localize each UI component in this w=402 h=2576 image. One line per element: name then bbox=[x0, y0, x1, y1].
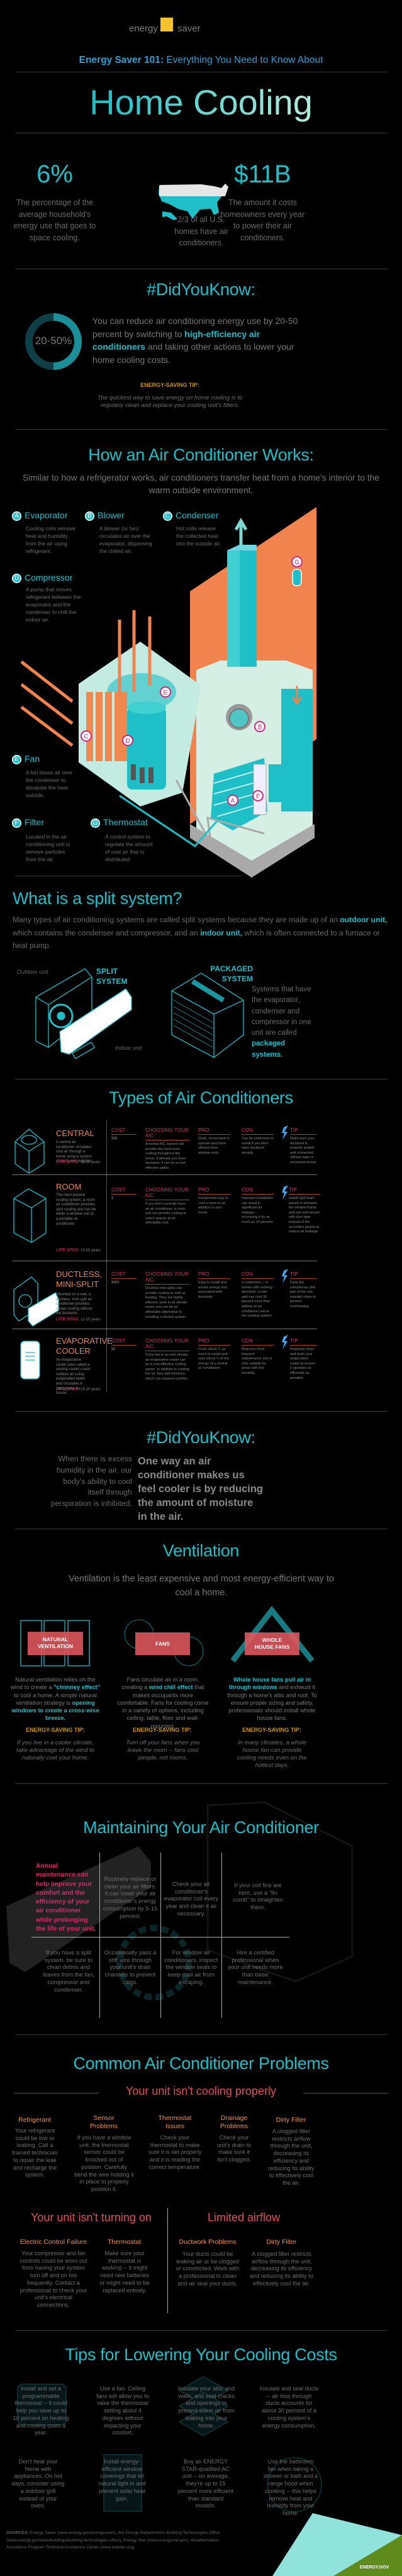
ventilation: whole house fans: HOUSE FANS bbox=[255, 1644, 289, 1650]
text: Use the bathroom fan when taking a shower or bath and a range hood when cooking -- this helps remove heat and humidity from your home. bbox=[264, 2458, 318, 2516]
row: ductless: CHOOSING YOUR A/C bbox=[145, 1271, 189, 1283]
did you know text: You can reduce air conditioning energy use by 20-50 percent by switching to high-efficiency air conditioners and taking other actions to lower your home cooling costs. bbox=[92, 316, 298, 365]
problem: thermostat: Thermostat bbox=[158, 2114, 192, 2122]
row: central: $$$ bbox=[111, 1137, 117, 1140]
stat 6%: 6% bbox=[36, 160, 73, 188]
row: ductless: CON bbox=[242, 1271, 253, 1277]
subheading: not cooling bbox=[14, 2093, 99, 2094]
text: Dirty Filter bbox=[267, 2238, 296, 2246]
ventilation: natural bbox=[28, 1632, 83, 1655]
label C condenser: C bbox=[165, 513, 170, 520]
type icons bbox=[14, 1129, 59, 1379]
text: Similar to how a refrigerator works, air conditioners transfer heat from a home's interior to the warm outside environment. bbox=[23, 473, 379, 495]
row: room: $ bbox=[111, 1196, 113, 1200]
packaged system text: SYSTEM bbox=[222, 974, 253, 983]
ventilation: natural: VENTILATION bbox=[38, 1643, 73, 1649]
problem: drainage bbox=[220, 2114, 248, 2130]
energy tip 1: ENERGY-SAVING TIP: bbox=[140, 382, 199, 388]
row: central: TIP bbox=[290, 1127, 298, 1133]
row: evaporative: Requires more frequent maintenance and is only suitable for areas with low humidity. bbox=[242, 1347, 272, 1375]
text: The quickest way to save energy on home cooling is to regularly clean and replace your cooling unit's filters. bbox=[98, 394, 242, 409]
AC diagram illustration: D bbox=[125, 738, 130, 745]
problem: thermostat: Issues bbox=[165, 2122, 184, 2130]
stat $11B: $11B bbox=[234, 160, 291, 188]
row: room: The most popular cooling system, a room air conditioner provides spot cooling and can be either a window unit or a portable air conditioner. bbox=[56, 1193, 96, 1226]
energy.gov badge: ENERGY.GOV bbox=[360, 2565, 389, 2570]
maintenance grid: Annual maintenance can help improve your comfort and the efficiency of your air conditioner while prolonging the life of your unit. bbox=[36, 1863, 96, 1932]
row: room: CHOOSING YOUR A/C bbox=[145, 1187, 189, 1198]
page curl bbox=[272, 2513, 402, 2576]
label G thermostat: Thermostat bbox=[103, 817, 148, 827]
text: Systems that have the evaporator, condenser and compressor in one unit are called packaged systems. bbox=[252, 986, 311, 1059]
AC diagram illustration: G bbox=[294, 559, 299, 566]
row: ductless: Ductless mini-splits can provide cooling as well as heating. They are highly efficient, work in all climate zones and can be an affordable alternative to installing a ducted system. bbox=[145, 1286, 187, 1319]
text: Your ducts could be leaking air or be clogged or constricted. Work with a professional to clean and air seal your ducts. bbox=[176, 2251, 239, 2287]
row: central: Can be expensive to install if you don't have ductwork already. bbox=[242, 1137, 274, 1155]
row: evaporative: An evaporative cooler (also called a swamp cooler) cools outdoor air using evaporated water and circulates it throughout the house. bbox=[56, 1358, 91, 1395]
heading: split system: What is a split system? bbox=[13, 889, 182, 908]
heading: tips: Tips for Lowering Your Cooling Costs bbox=[65, 2345, 337, 2364]
label D compressor: D bbox=[14, 575, 19, 582]
text: Use a fan. Ceiling fans will allow you to raise the thermostat setting about 4 degrees without impacting your comfort. bbox=[96, 2385, 149, 2436]
sources: SOURCES: Energy Saver (www.energy.gov/energysaver), the Energy Department's Building Technologies Office (www.energy.gov/eere/buildings/building-technologies-office), Energy Star (www.energystar.gov), Weatherization Assistance Program Technical Assistance Center (www.waptac.org) bbox=[6, 2531, 220, 2550]
ventilation: fans: FANS bbox=[155, 1641, 170, 1647]
row: central: COST bbox=[111, 1127, 125, 1133]
row: evaporative: $$ bbox=[111, 1347, 115, 1351]
AC diagram illustration: E bbox=[164, 689, 168, 696]
text: Natural ventilation relies on the wind to create a "chimney effect" to cool a home. A simple natural ventilation strategy is opening windows to create a cross-wise breeze. bbox=[11, 1676, 100, 1721]
text: Turn off your fans when you leave the room -- fans cool people, not rooms. bbox=[126, 1739, 200, 1761]
AC diagram illustration: B bbox=[258, 724, 262, 731]
label B blower bbox=[85, 510, 125, 521]
ventilation: whole house fans: WHOLE bbox=[262, 1637, 282, 1643]
row: central: PRO bbox=[198, 1127, 209, 1133]
row: evaporative bbox=[56, 1336, 317, 1395]
stat $11B: The amount it costs homeowners every year to power their air conditioners. bbox=[221, 198, 304, 242]
row: evaporative: EVAPORATIVE bbox=[56, 1336, 113, 1346]
text: Indoor unit bbox=[115, 1045, 142, 1051]
row: central: A central air conditioner circulates cool air through a home using a system of ducts and registers. bbox=[56, 1140, 93, 1163]
stat 6% bbox=[14, 160, 96, 242]
problem: drainage: Drainage bbox=[221, 2114, 247, 2122]
row: central bbox=[56, 1127, 317, 1170]
packaged system illustration bbox=[172, 973, 243, 1057]
text: Hot coils release the collected heat into the outside air. bbox=[176, 525, 221, 547]
label G thermostat: G bbox=[93, 820, 98, 827]
text: Check your unit's drain to make sure it isn't clogged. bbox=[217, 2134, 251, 2163]
row: ductless: MINI-SPLIT bbox=[56, 1280, 99, 1289]
row: evaporative: LIFE SPAN: 15-20 years bbox=[56, 1387, 101, 1391]
bolt icons bbox=[282, 1125, 288, 1349]
text: A pump that moves refrigerant between the evaporator and the condenser to chill the indoor air. bbox=[26, 586, 81, 623]
text: Insulate and seal ducts -- air loss through ducts accounts for about 30 percent of a cooling system's energy consumption. bbox=[259, 2385, 318, 2429]
stat 2/3: 2/3 of all U.S. bbox=[177, 215, 225, 224]
maintenance grid: Check your air conditioner's evaporator coil every year and clean it as necessary. bbox=[164, 1881, 218, 1917]
donut chart 20-50% bbox=[29, 317, 78, 366]
text: Fans circulate air in a room, creating a wind chill effect that makes occupants more comfortable. Fans for cooling come in a variety of options, including ceiling, table, floor and wall-mounted. bbox=[117, 1676, 209, 1729]
heading: did you know 2: #DidYouKnow: bbox=[147, 1428, 255, 1447]
row: ductless: Is expensive -- in homes with existing ductwork, a mini-split can cost 30 percent more than adding an air conditioner unit to the existing system. bbox=[242, 1281, 272, 1318]
problem: drainage: Problems bbox=[220, 2122, 248, 2130]
logo bbox=[129, 18, 201, 34]
row: ductless: Mounted on a wall, a ductless, mini-split air conditioner provides zoned cooling without the ductwork. bbox=[56, 1293, 92, 1315]
maintenance grid: If your coil fins are bent, use a "fin comb" to straighten them. bbox=[233, 1882, 283, 1910]
text: SPLIT bbox=[96, 967, 118, 976]
row: ductless: TIP bbox=[290, 1271, 298, 1277]
text: In many climates, a whole house fan can provide cooling needs even on the hottest days. bbox=[237, 1739, 307, 1769]
text: If you live in a cooler climate, take advantage of the wind to naturally cool your home. bbox=[16, 1739, 94, 1761]
text: A clogged filter restricts airflow through the unit, decreasing its efficiency and reducing its ability to effectively cool the air. bbox=[250, 2251, 313, 2287]
text: Make sure your thermostat is working -- it might need new batteries or might need to be replaced entirely. bbox=[99, 2250, 150, 2294]
row: evaporative: TIP bbox=[290, 1338, 298, 1344]
ventilation: fans bbox=[135, 1632, 190, 1655]
row: room: PRO bbox=[198, 1187, 209, 1193]
subheading: limited airflow: Limited airflow bbox=[208, 2211, 280, 2224]
label B blower: B bbox=[87, 513, 92, 520]
row: room: Improper installation can result in significant air leakage – increasing it by as much as 10 percent. bbox=[242, 1196, 274, 1224]
subtitle: Energy Saver 101: Everything You Need to Know About bbox=[79, 55, 323, 65]
text: Whole house fans pull air in through windows and exhaust it through a home's attic and roof. To ensure proper sizing and safety, professionals should install whole house fans. bbox=[227, 1676, 317, 1721]
label F filter bbox=[12, 817, 44, 828]
text: Your compressor and fan controls could be worn out from having your system turn off and on too frequently. Contact a professional to check your unit's electrical connections. bbox=[20, 2250, 87, 2308]
row: central: CENTRAL bbox=[56, 1129, 94, 1138]
label E fan: Fan bbox=[25, 754, 40, 764]
row: room: CON bbox=[242, 1187, 253, 1193]
row: central: Quiet, convenient to operate and more efficient than window units. bbox=[198, 1137, 230, 1155]
problem: dirty filter: Dirty Filter bbox=[276, 2116, 306, 2124]
text: ENERGY-SAVING TIP: bbox=[242, 1727, 301, 1733]
row: evaporative: Costs about ½ as much to install and uses about ¼ of the energy of a central air conditioner. bbox=[198, 1347, 229, 1370]
table: types bbox=[13, 1120, 317, 1392]
problem: thermostat bbox=[158, 2114, 192, 2130]
text: Install energy-efficient window coverings that let natural light in and prevent solar heat gain. bbox=[98, 2458, 146, 2502]
label F filter: F bbox=[14, 820, 19, 827]
text: Your refrigerant could be low or leaking. Call a trained technician to repair the leak and recharge the system. bbox=[12, 2127, 58, 2178]
AC diagram illustration: F bbox=[256, 793, 260, 800]
problem: refrigerant: Refrigerant bbox=[18, 2116, 51, 2124]
stat 6%: The percentage of the average household's energy use that goes to space cooling. bbox=[14, 198, 96, 242]
text: When there is excess humidity in the air, our body's ability to cool itself through perspiration is inhibited. bbox=[51, 1454, 132, 1508]
packaged system text: PACKAGED bbox=[210, 964, 253, 973]
row: central: LIFE SPAN: 15-20 years bbox=[56, 1160, 101, 1164]
row: room: LIFE SPAN: 10-15 years bbox=[56, 1248, 101, 1252]
split system labels: Outdoor unit bbox=[17, 969, 48, 975]
row: evaporative: COST bbox=[111, 1338, 125, 1344]
split system illustration bbox=[36, 969, 131, 1059]
label E fan bbox=[12, 754, 40, 764]
stat 2/3: conditioners. bbox=[179, 238, 223, 247]
tips row 2: Don't heat your home with appliances. On hot days, consider using a outdoor grill instead of your oven. bbox=[12, 2458, 64, 2509]
packaged system text bbox=[210, 964, 253, 983]
problem: sensor: Problems bbox=[90, 2122, 118, 2130]
text: Ventilation is the least expensive and most energy-efficient way to cool a home. bbox=[69, 1574, 334, 1598]
label A evaporator: Evaporator bbox=[25, 510, 67, 520]
row: room: Install rigid foam panels in between the window frame and unit and secure with duct tape instead of the accordion panels to reduce air leakage. bbox=[289, 1196, 320, 1234]
row: room: ROOM bbox=[56, 1182, 81, 1191]
text: A blower (or fan) circulates air over the evaporator, dispersing the chilled air. bbox=[99, 525, 152, 554]
row: ductless bbox=[56, 1269, 317, 1322]
AC diagram illustration bbox=[21, 507, 316, 878]
text: Many types of air conditioning systems are called split systems because they are made up of an outdoor unit, which contains the condenser and compressor, and an indoor unit, which is often connected to a furnace or heat pump. bbox=[13, 915, 387, 950]
stat 2/3 bbox=[174, 215, 228, 247]
subheading: not turning on: Your unit isn't turning on bbox=[31, 2211, 152, 2224]
stat 2/3: homes have air bbox=[174, 226, 228, 235]
text: A clogged filter restricts airflow through the unit, decreasing its efficiency and reducing its ability to effectively cool the air. bbox=[268, 2128, 315, 2186]
icon: US map bbox=[159, 184, 228, 220]
row: central: CHOOSING YOUR A/C bbox=[145, 1127, 189, 1139]
row: ductless: Easy to install and avoids energy loss associated with ductwork. bbox=[198, 1281, 227, 1299]
text: If you have a window unit, the thermostat sensor could be knocked out of position. Carefully bend the wire holding it in place to properly position it. bbox=[74, 2134, 134, 2192]
heading: types: Types of Air Conditioners bbox=[109, 1088, 293, 1107]
row: room: COST bbox=[111, 1187, 125, 1193]
ventilation: whole house fans bbox=[245, 1632, 299, 1655]
heading: ventilation: Ventilation bbox=[163, 1541, 239, 1560]
text: Located in the air conditioning unit to remove particles from the air. bbox=[26, 834, 70, 862]
text: Electric Control Failure bbox=[20, 2238, 87, 2246]
row: central: Make sure your ductwork is properly sealed and connected without sags or excessive bends. bbox=[290, 1137, 317, 1164]
text: A control system to regulate the amount of cool air that is distributed. bbox=[105, 834, 153, 862]
ventilation icons bbox=[21, 1610, 312, 1666]
label D compressor: Compressor bbox=[25, 572, 72, 583]
row: ductless: COST bbox=[111, 1271, 125, 1277]
AC diagram illustration: C bbox=[84, 733, 89, 740]
text: A fan blows air over the condenser to dissipate the heat outside. bbox=[26, 769, 72, 798]
text: Ductwork Problems bbox=[179, 2238, 237, 2246]
row: ductless: Keep the compressor (the part of the unit outside) clean to prevent overheating. bbox=[290, 1281, 316, 1308]
heading: did you know 1: #DidYouKnow: bbox=[147, 280, 255, 299]
row: evaporative: COOLER bbox=[56, 1346, 91, 1356]
row: room: TIP bbox=[289, 1187, 296, 1193]
tips row 1: Install and set a programmable thermostat -- it could help you save up to 10 percent on heating and cooling costs a year. bbox=[13, 2385, 69, 2436]
label F filter: Filter bbox=[25, 817, 44, 827]
text: SYSTEM bbox=[96, 976, 127, 985]
problem: sensor bbox=[90, 2114, 118, 2130]
label B blower: Blower bbox=[98, 510, 125, 520]
maintenance background bbox=[6, 1802, 352, 1997]
row: evaporative: Regularly clean and drain your evaporative cooler to ensure it operates as efficiently as possible. bbox=[290, 1347, 315, 1380]
text: Your unit isn't cooling properly bbox=[126, 2085, 276, 2097]
title: Home Cooling bbox=[89, 82, 313, 122]
text: Buy an ENERGY STAR-qualified AC unit -- on average, they're up to 15 percent more efficient than standard models. bbox=[178, 2458, 233, 2509]
maintenance grid: For window air conditioners, inspect the window seals to keep cool air from escaping. bbox=[165, 1949, 218, 1985]
text: ENERGY-SAVING TIP: bbox=[133, 1727, 192, 1733]
row: evaporative: PRO bbox=[198, 1338, 209, 1344]
row: room: Inexpensive way to cool a room or an addition to your home. bbox=[198, 1196, 228, 1215]
row: evaporative: CHOOSING YOUR A/C bbox=[145, 1338, 189, 1349]
heading: how an AC works: How an Air Conditioner Works: bbox=[88, 445, 314, 464]
AC diagram illustration: A bbox=[231, 798, 235, 805]
row: ductless: DUCTLESS, bbox=[56, 1269, 102, 1279]
logo: energy bbox=[129, 23, 158, 34]
row: ductless: PRO bbox=[198, 1271, 209, 1277]
maintenance grid bbox=[31, 1853, 289, 2018]
row: room: If you don't currently have an air conditioner, a room unit can provide cooling to select spaces at an affordable cost. bbox=[145, 1202, 186, 1225]
maintenance grid: Hire a certified professional when your unit needs more than basic maintenance. bbox=[228, 1949, 283, 1985]
maintenance grid: If you have a split system, be sure to clean debris and leaves from the fan, compressor and condenser. bbox=[43, 1949, 94, 1993]
tips icons faint bbox=[18, 2377, 321, 2512]
icon: house bbox=[160, 18, 173, 31]
text: Thermostat bbox=[108, 2238, 141, 2246]
label E fan: E bbox=[14, 756, 19, 763]
maintenance grid: Occasionally pass a stiff wire through your unit's drain channels to prevent clogs. bbox=[104, 1949, 156, 1985]
row: ductless: LIFE SPAN: 12-15 years bbox=[56, 1317, 101, 1322]
stat $11B bbox=[221, 160, 304, 242]
heading: maintaining: Maintaining Your Air Conditioner bbox=[83, 1818, 319, 1837]
label C condenser: Condenser bbox=[176, 510, 219, 520]
problem: sensor: Sensor bbox=[93, 2114, 114, 2122]
maintenance grid: Routinely replace or clean your air filters. It can lower your air conditioner's energy consumption by 5-15 percent. bbox=[103, 1876, 157, 1919]
row: central: A central A/C system will provide the most even cooling throughout the home. If already you have ductwork, it can be a cost-effective option. bbox=[145, 1142, 186, 1170]
ventilation: natural: NATURAL bbox=[43, 1636, 68, 1642]
heading: problems: Common Air Conditioner Problems bbox=[73, 2054, 329, 2073]
row: ductless: $$$$ bbox=[111, 1281, 119, 1285]
text: One way an air conditioner makes us feel cooler is by reducing the amount of moisture in the air. bbox=[138, 1456, 263, 1522]
row: evaporative: CON bbox=[242, 1338, 253, 1344]
row: room bbox=[56, 1182, 320, 1252]
donut label: 20-50% bbox=[35, 335, 72, 347]
text: Cooling coils remove heat and humidity from the air using refrigerant. bbox=[26, 525, 75, 554]
text: Insulate your attic and walls, and seal cracks and openings to prevent warm air from leaking into your home. bbox=[178, 2385, 235, 2429]
logo: saver bbox=[177, 23, 201, 34]
row: evaporative: If you live in an arid climate, an evaporative cooler can be a cost-effective cooling option. In addition to cooling the air, they add moisture, which can improve comfort. bbox=[145, 1353, 189, 1381]
row: central: CON bbox=[242, 1127, 253, 1133]
text: Check your thermostat to make sure it is set properly and it is reading the correct temperature. bbox=[148, 2134, 201, 2170]
label A evaporator: A bbox=[14, 513, 19, 520]
text: ENERGY-SAVING TIP: bbox=[26, 1727, 85, 1733]
